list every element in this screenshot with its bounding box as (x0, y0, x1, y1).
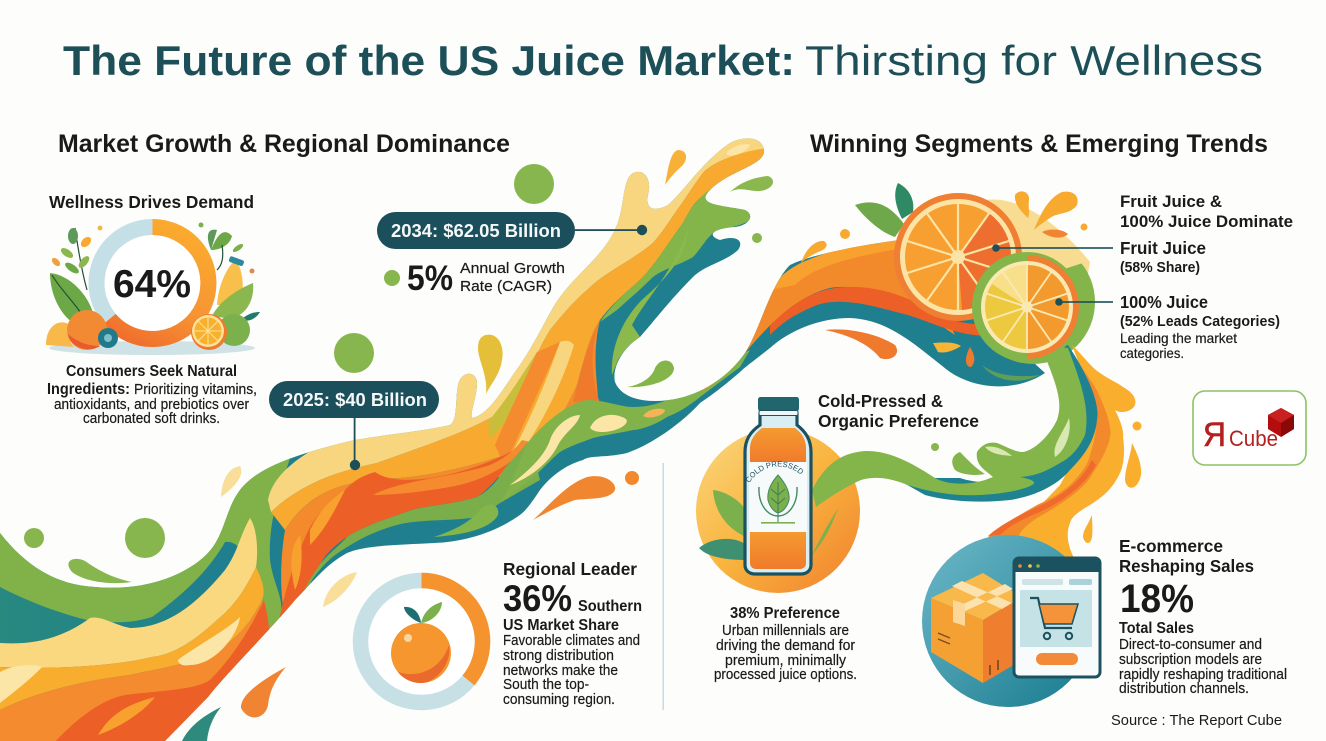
highlights (0, 144, 750, 703)
illustration: leaves behind bottle (699, 490, 838, 560)
drop red near lime (966, 347, 974, 367)
text: 38% preference: premium, minimally (725, 652, 846, 669)
text: consumers seek natural: carbonated soft drinks. (83, 410, 220, 427)
text: fruit juice block: 100% Juice (1120, 292, 1208, 312)
text: regional leader: networks make the (503, 662, 618, 679)
text: e-commerce block: subscription models are (1119, 651, 1262, 668)
citrus and lime (191, 314, 250, 350)
dot: orange (625, 471, 639, 485)
text: 38% preference (714, 605, 857, 683)
cart icon (1030, 598, 1078, 639)
callout: 2025 value: 2025: $40 Billion (283, 389, 427, 410)
amber upper band (271, 148, 770, 530)
green crescent behind lime (971, 240, 1095, 364)
heading: winning segments: Winning Segments & Emerging Trends (810, 130, 1268, 158)
donut 64% arc (110, 227, 208, 339)
text: 38% preference: 38% Preference (730, 605, 840, 622)
illustration: e-commerce circle (922, 535, 1094, 707)
donut track (96, 227, 208, 339)
drop amber near lime (933, 342, 961, 353)
text: consumers seek natural (47, 363, 257, 427)
title: The Future of the US Juice Market: (63, 37, 795, 84)
text: 38% preference: driving the demand for (716, 637, 855, 654)
stem: teal and lower wave (895, 345, 1098, 502)
logo: RCube: Cube (1229, 426, 1278, 451)
text: fruit juice block: Fruit Juice & (1120, 192, 1222, 211)
juice flow splash (0, 115, 1142, 741)
red orange central band (279, 451, 512, 618)
text: fruit juice block: (52% Leads Categories) (1120, 314, 1280, 330)
text: 38% preference: processed juice options. (714, 666, 857, 683)
green stripe in stream (982, 365, 1040, 381)
callout: 2034 value: 2034: $62.05 Billion (391, 220, 561, 241)
logo: RCube (1193, 391, 1306, 465)
heading: market growth: Market Growth & Regional Dominance (58, 130, 510, 158)
illustration: parcel box (931, 573, 1022, 683)
text: regional leader: 36% (503, 578, 572, 619)
orange middle band (281, 320, 600, 612)
text: fruit juice block: categories. (1120, 345, 1184, 361)
text: consumers seek natural: Prioritizing vitamins, (134, 381, 257, 398)
apple and berries (46, 310, 118, 350)
text: regional leader: strong distribution (503, 647, 614, 664)
bottle label text: COLD PRESSED (746, 461, 803, 482)
text: wellness drives demand: Wellness Drives Demand (49, 192, 254, 212)
drop: green in hole (627, 360, 674, 387)
illustration: bottle circle (696, 429, 860, 593)
orange streak (495, 342, 560, 467)
title: Thirsting for Wellness (805, 37, 1263, 84)
inner green strip (612, 228, 688, 375)
callout: 2034 value (377, 212, 647, 249)
text: regional leader: Favorable climates and (503, 632, 640, 649)
splashes top of citrus (1015, 191, 1088, 238)
text: e-commerce block (1119, 536, 1287, 697)
stem: red streak (988, 460, 1096, 536)
regional donut with orange (360, 580, 483, 702)
leaf on flow (434, 505, 498, 537)
text: cold pressed heading: Organic Preference (818, 411, 979, 431)
splash: orange right (533, 476, 615, 520)
stem: orange (985, 352, 1111, 540)
text: e-commerce block: E-commerce (1119, 536, 1223, 556)
stat: 5% growth: 5% (407, 259, 453, 298)
pale blob behind citrus (985, 199, 1090, 320)
text: 38% preference: Urban millennials are (722, 622, 849, 639)
leaf beside wave (952, 452, 985, 475)
stat: 5% growth: Rate (CAGR) (460, 278, 552, 295)
text: fruit juice block: Leading the market (1120, 330, 1237, 346)
amber blob (643, 409, 665, 417)
text: fruit juice block: (58% Share) (1120, 260, 1200, 276)
text: cold pressed heading (818, 391, 979, 431)
drops: pale left (221, 466, 357, 607)
central pale yellow (268, 115, 780, 512)
drop: green top right (730, 176, 773, 192)
stream orange band (700, 236, 955, 392)
drop: yellow left (478, 335, 503, 394)
divider (662, 463, 664, 710)
stat: 5% growth: Annual Growth (460, 260, 565, 277)
dots and drops (24, 164, 939, 583)
callout lines for citrus (992, 244, 1113, 306)
text: fruit juice block: Fruit Juice (1120, 238, 1206, 258)
text: cold pressed heading: Cold-Pressed & (818, 391, 943, 411)
citrus: orange slice (855, 183, 1022, 321)
text: regional leader: US Market Share (503, 617, 619, 634)
bottle label leaf (759, 475, 797, 524)
text: fruit juice block (1120, 192, 1293, 361)
citrus: lime slice (972, 252, 1082, 362)
text: consumers seek natural: Ingredients: (47, 381, 130, 398)
left foliage (50, 226, 102, 330)
drop under stream (825, 329, 897, 359)
text: e-commerce block: Total Sales (1119, 620, 1194, 637)
right foliage and bottle (198, 222, 260, 321)
text: fruit juice block: 100% Juice Dominate (1120, 212, 1293, 231)
dot amber (1132, 422, 1142, 430)
wellness donut with fruit (46, 222, 260, 355)
mid green band (304, 440, 540, 590)
text: e-commerce block: distribution channels. (1119, 680, 1249, 697)
illustration: shopping app window (1014, 558, 1100, 677)
text: regional leader: South the top- (503, 676, 589, 693)
text: e-commerce block: Direct-to-consumer and (1119, 636, 1262, 653)
text: regional leader: consuming region. (503, 691, 615, 708)
drop: amber top (665, 150, 686, 185)
drop: orange bottom (241, 667, 286, 717)
text: e-commerce block: Reshaping Sales (1119, 556, 1254, 576)
text: consumers seek natural: antioxidants, and prebiotics over (54, 396, 249, 413)
source note: Source : The Report Cube (1111, 712, 1282, 729)
orange strip near teal (573, 320, 600, 403)
text: regional leader (503, 559, 642, 708)
logo: RCube: Я (1203, 416, 1226, 454)
pale blob upper overlay (985, 204, 1086, 272)
donut value: 64% (113, 263, 191, 306)
drop orange upper left of citrus (801, 241, 827, 263)
text: e-commerce block: rapidly reshaping traditional (1119, 666, 1287, 683)
callout: 2025 value (269, 381, 439, 470)
illustration: juice bottle (743, 397, 813, 576)
logo cube (1268, 408, 1294, 437)
drop: teal bottom (182, 707, 221, 741)
upper green (600, 188, 752, 322)
green wave stream (812, 345, 1086, 507)
lower green stream (500, 350, 750, 503)
text: consumers seek natural: Consumers Seek Natural (66, 363, 237, 380)
stat: 5% growth (407, 259, 565, 298)
text: regional leader: Southern (578, 598, 642, 615)
text: e-commerce block: 18% (1120, 577, 1194, 621)
pale streak (514, 340, 574, 449)
text: regional leader: Regional Leader (503, 559, 637, 579)
pale highlights on wave (985, 418, 1070, 457)
drops right of stem (1083, 443, 1141, 543)
orange fruit icon (391, 602, 451, 683)
title (63, 37, 1263, 84)
stem: amber (1010, 345, 1135, 560)
yellow-green streak (488, 352, 537, 438)
